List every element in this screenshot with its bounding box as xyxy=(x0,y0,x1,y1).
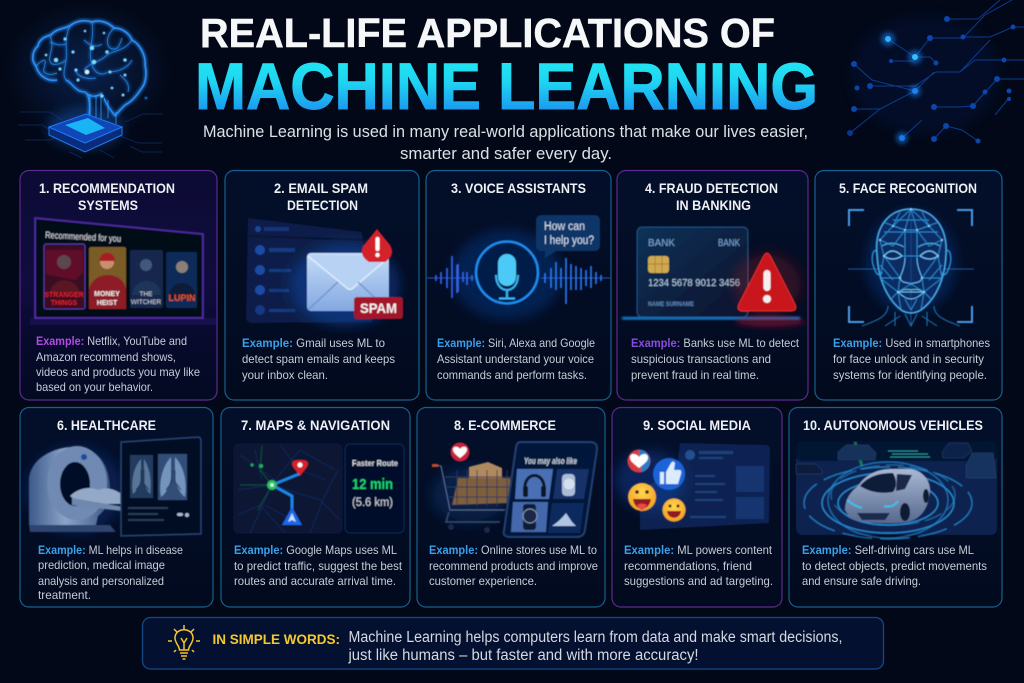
icon: glowing brain on chip xyxy=(3,0,173,158)
description: suggestions and ad targeting. xyxy=(624,574,773,588)
subtitle: Machine Learning is used in many real-world applications that make our lives easier, xyxy=(203,122,808,141)
heading: 9. SOCIAL MEDIA xyxy=(643,417,751,433)
heading: 5. FACE RECOGNITION xyxy=(839,180,977,196)
illustration: CT scanner and lung scans xyxy=(25,437,201,536)
label: IN SIMPLE WORDS: xyxy=(212,631,340,647)
description: recommend products and improve xyxy=(429,559,598,573)
description: Example: Online stores use ML to xyxy=(429,543,597,557)
description xyxy=(234,543,403,588)
heading: 8. E-COMMERCE xyxy=(454,417,556,433)
description: prediction, medical image xyxy=(38,558,165,572)
description xyxy=(242,336,395,382)
illustration: spam email: SPAM xyxy=(360,300,397,316)
panel: maps and navigation xyxy=(221,408,410,607)
description: Example: Self-driving cars use ML xyxy=(802,543,974,557)
panel: face recognition xyxy=(815,170,1002,400)
description: customer experience. xyxy=(429,574,537,588)
description: your inbox clean. xyxy=(242,368,328,382)
illustration: map with route: (5.6 km) xyxy=(352,497,393,509)
illustration: bank card with warning: NAME SURNAME xyxy=(648,302,694,308)
illustration: microphone and sound waves: How can xyxy=(544,221,585,233)
panel: recommendation systems xyxy=(20,170,217,400)
illustration: cart and phone: You may also like xyxy=(524,456,577,467)
illustration: bank card with warning: BANK xyxy=(718,238,740,249)
description: to detect objects, predict movements xyxy=(802,559,987,573)
illustration: bank card with warning xyxy=(622,227,805,328)
illustration: laptop with posters: Recommended for you xyxy=(45,230,121,245)
description xyxy=(624,543,773,588)
illustration: laptop with posters: THINGS xyxy=(51,300,78,307)
heading: DETECTION xyxy=(287,197,358,213)
heading: 1. RECOMMENDATION xyxy=(39,180,175,196)
illustration: laptop with posters: THE xyxy=(140,291,153,298)
description: analysis and personalized xyxy=(38,574,164,588)
illustration: social reactions xyxy=(615,443,770,530)
illustration: laptop with posters xyxy=(30,218,216,325)
description: Example: Banks use ML to detect xyxy=(631,336,800,350)
description: Assistant understand your voice xyxy=(437,352,594,366)
description xyxy=(833,336,990,382)
description: Example: Used in smartphones xyxy=(833,336,990,350)
icon: circuit network xyxy=(847,0,1024,144)
illustration: microphone and sound waves: I help you? xyxy=(544,235,594,247)
description: based on your behavior. xyxy=(36,380,153,394)
illustration: map with route: Faster Route xyxy=(352,458,398,468)
heading: 4. FRAUD DETECTION xyxy=(645,180,778,196)
illustration: map with route xyxy=(234,444,404,533)
description: detect spam emails and keeps xyxy=(242,352,395,366)
description: recommendations, friend xyxy=(624,559,752,573)
description: and ensure safe driving. xyxy=(802,574,921,588)
illustration: cart and phone xyxy=(430,442,597,537)
illustration: laptop with posters: WITCHER xyxy=(131,299,161,306)
heading xyxy=(274,180,368,213)
description xyxy=(437,336,595,382)
summary text xyxy=(348,629,842,664)
description: Example: Gmail uses ML to xyxy=(242,336,385,350)
description: Example: Siri, Alexa and Google xyxy=(437,336,595,350)
panel: e-commerce xyxy=(417,408,605,607)
illustration: laptop with posters: MONEY xyxy=(94,291,120,298)
description: Example: Netflix, YouTube and xyxy=(36,334,187,348)
icon: lightbulb xyxy=(168,625,200,659)
description xyxy=(802,543,987,588)
summary text: just like humans – but faster and with more accuracy! xyxy=(348,647,698,664)
illustration: bank card with warning: 1234 5678 9012 3456 xyxy=(648,278,740,289)
description: to predict traffic, suggest the best xyxy=(234,559,403,573)
description: commands and perform tasks. xyxy=(437,368,587,382)
description: treatment. xyxy=(38,588,91,602)
description: Example: ML helps in disease xyxy=(38,543,183,557)
heading: IN BANKING xyxy=(676,197,751,213)
description xyxy=(631,336,800,382)
panel: healthcare xyxy=(20,408,213,607)
panel: autonomous vehicles xyxy=(789,408,1002,607)
heading: 6. HEALTHCARE xyxy=(57,417,156,433)
description: videos and products you may like xyxy=(36,365,200,379)
callout: in simple words xyxy=(142,618,884,669)
panel: fraud detection xyxy=(617,170,808,400)
illustration: self-driving car with sensors xyxy=(796,441,997,539)
subtitle xyxy=(203,122,808,163)
heading: 2. EMAIL SPAM xyxy=(274,180,368,196)
illustration: laptop with posters: STRANGER xyxy=(44,292,84,299)
illustration: laptop with posters: LUPIN xyxy=(168,293,196,303)
illustration: bank card with warning: BANK xyxy=(648,238,675,249)
description xyxy=(429,543,598,588)
illustration: microphone and sound waves xyxy=(427,215,610,320)
description xyxy=(36,334,200,394)
heading xyxy=(39,180,175,213)
illustration: spam email xyxy=(246,218,403,327)
heading: 3. VOICE ASSISTANTS xyxy=(451,180,586,196)
title: first line: REAL-LIFE APPLICATIONS OF xyxy=(200,10,775,56)
illustration: laptop with posters: HEIST xyxy=(97,300,118,307)
heading: SYSTEMS xyxy=(78,197,138,213)
description: Example: ML powers content xyxy=(624,543,773,557)
title: machine learning: MACHINE LEARNING xyxy=(195,49,818,123)
description: suspicious transactions and xyxy=(631,352,771,366)
panel: social media xyxy=(612,408,782,607)
description: Amazon recommend shows, xyxy=(36,350,176,364)
description xyxy=(38,543,183,602)
description: for face unlock and in security xyxy=(833,352,984,366)
heading: 7. MAPS & NAVIGATION xyxy=(241,417,390,433)
description: Example: Google Maps uses ML xyxy=(234,543,397,557)
subtitle: smarter and safer every day. xyxy=(400,144,612,163)
description: routes and accurate arrival time. xyxy=(234,574,396,588)
heading: 10. AUTONOMOUS VEHICLES xyxy=(803,417,983,433)
heading xyxy=(645,180,778,213)
illustration: map with route: 12 min xyxy=(352,476,393,493)
panel: email spam detection xyxy=(225,170,419,400)
description: systems for identifying people. xyxy=(833,368,987,382)
illustration: face scan mesh xyxy=(848,208,974,326)
summary text: Machine Learning helps computers learn from data and make smart decisions, xyxy=(348,629,842,646)
description: prevent fraud in real time. xyxy=(631,368,759,382)
panel: voice assistants xyxy=(426,170,611,400)
